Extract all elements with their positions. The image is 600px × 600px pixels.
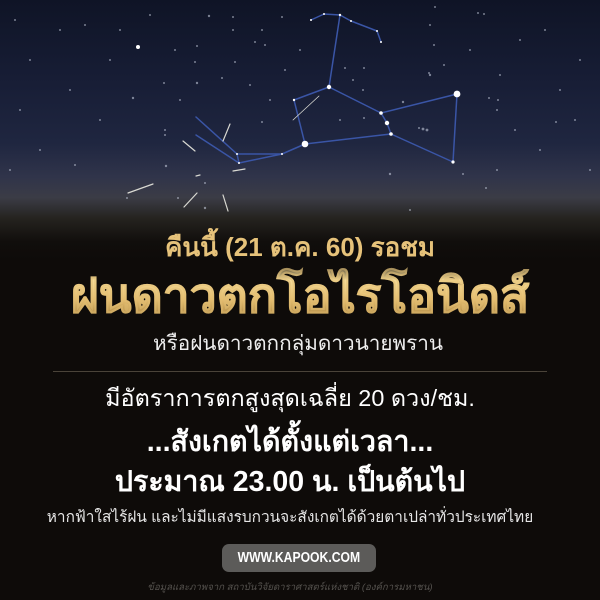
- background stars: [9, 6, 591, 211]
- title: [0, 253, 600, 331]
- heading: date line: คืนนี้ (21 ต.ค. 60) รอชม: [165, 232, 435, 262]
- subtitle: หรือฝนดาวตกกลุ่มดาวนายพราน: [153, 332, 443, 355]
- viewing note: หากฟ้าใสไร้ฝน และไม่มีแสงรบกวนจะสังเกตได้ด้วยตาเปล่าทั่วประเทศไทย: [47, 509, 533, 526]
- night sky constellation illustration: [0, 0, 600, 236]
- rate text: มีอัตราการตกสูงสุดเฉลี่ย 20 ดวง/ชม.: [105, 385, 475, 411]
- observation time: ประมาณ 23.00 น. เป็นต้นไป: [115, 466, 465, 498]
- meteor streaks: [128, 96, 319, 211]
- title: ฝนดาวตกโอไรโอนิดส์: [71, 270, 529, 323]
- constellation stars: [236, 13, 460, 164]
- source credit: ข้อมูลและภาพจาก สถาบันวิจัยดาราศาสตร์แห่งชาติ (องค์การมหาชน): [147, 582, 433, 593]
- observation time heading: ...สังเกตได้ตั้งแต่เวลา...: [147, 426, 433, 458]
- bright star: [136, 45, 140, 49]
- website badge: WWW.KAPOOK.COM: [238, 550, 360, 566]
- divider: [53, 371, 547, 372]
- website badge: [222, 544, 376, 572]
- constellation lines: [196, 14, 457, 163]
